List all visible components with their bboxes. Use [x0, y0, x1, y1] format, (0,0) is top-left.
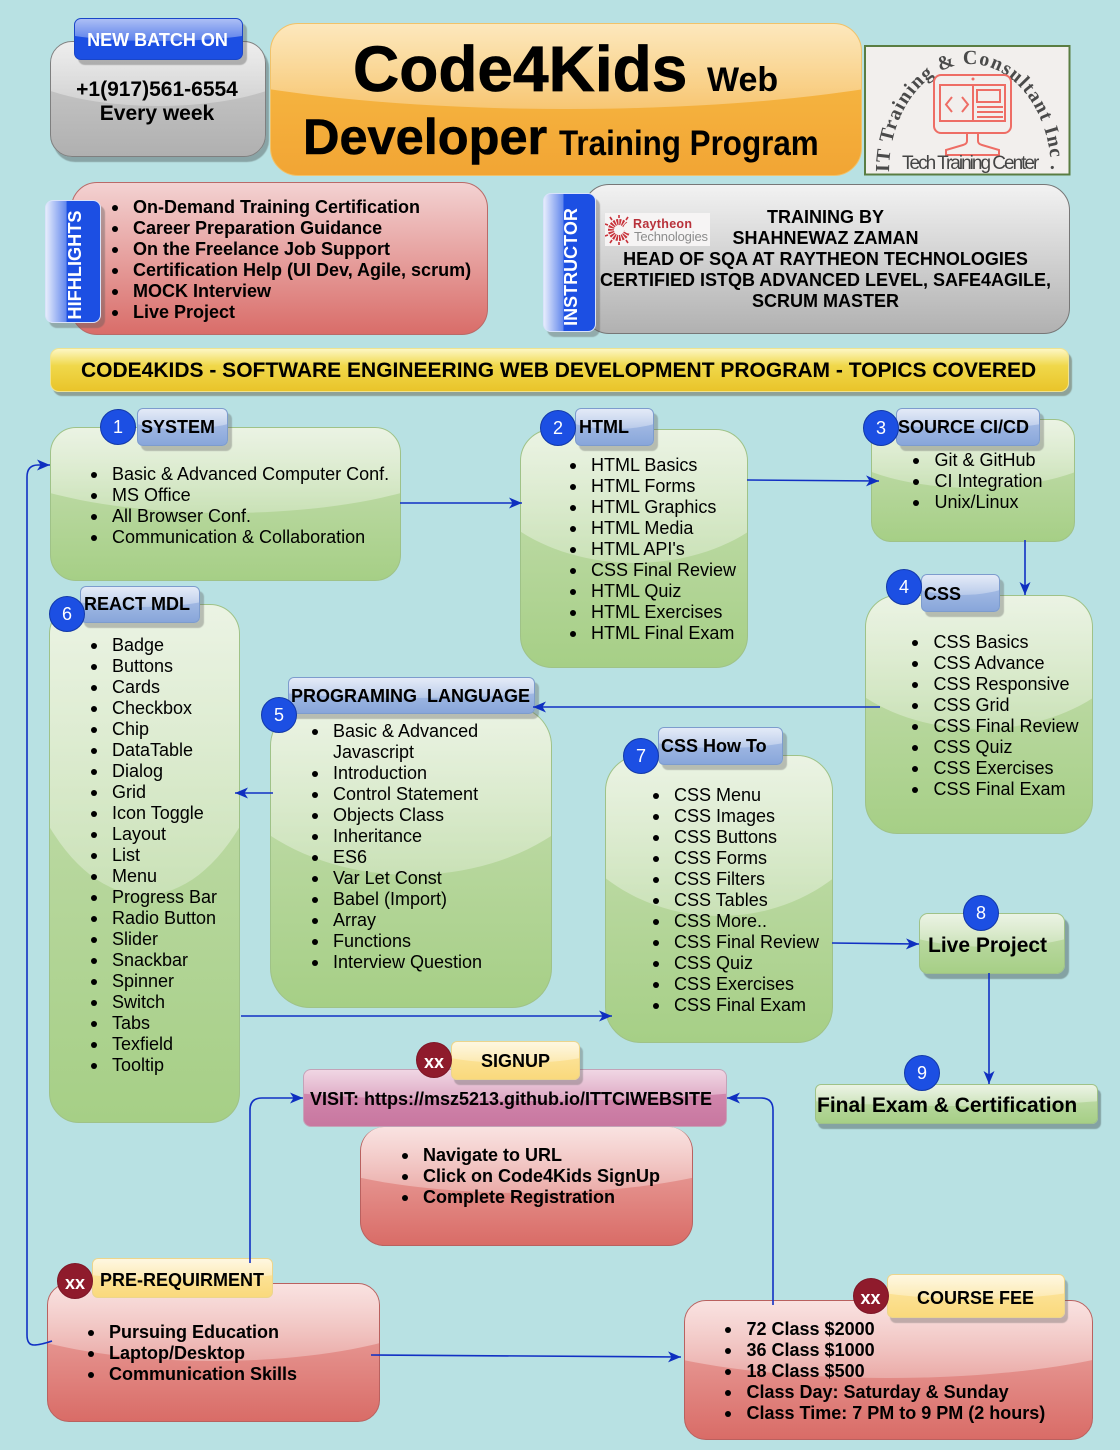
panel: signup: [303, 1041, 727, 1246]
badge: 6: 6: [62, 604, 72, 624]
heading: css: CSS: [924, 584, 961, 604]
list: css how to: CSS Quiz: [674, 953, 753, 973]
arrow: programing language to react: [235, 792, 273, 794]
list: css: CSS Grid: [934, 695, 1010, 715]
list: highlights: Certification Help (UI Dev, Agile, scrum): [133, 260, 471, 280]
list: html: HTML Forms: [591, 476, 695, 496]
heading: programing language: PROGRAMING LANGUAGE: [291, 686, 530, 706]
list: react mdl: Checkbox: [112, 698, 192, 718]
panel: highlights: [45, 182, 488, 335]
arrow: pre-requirment to signup: [250, 1098, 303, 1263]
arrow: system to html: [400, 502, 522, 504]
badge: 9: [904, 1055, 940, 1091]
list: programing language: Array: [333, 910, 376, 930]
list: react mdl: Texfield: [112, 1034, 173, 1054]
list: programing language: [312, 720, 482, 972]
panel: title: [270, 23, 862, 176]
panel: instructor: [543, 184, 1070, 338]
list: react mdl: Dialog: [112, 761, 163, 781]
list: source ci/cd: CI Integration: [934, 471, 1043, 491]
heading: system: SYSTEM: [141, 417, 215, 437]
list: css how to: CSS Menu: [674, 785, 761, 805]
list: react mdl: Layout: [112, 824, 166, 844]
badge: 7: [623, 738, 659, 774]
list: html: HTML Graphics: [591, 497, 716, 517]
tab: source ci/cd: [896, 408, 1040, 446]
badge: signup: xx: [424, 1052, 444, 1072]
list: react mdl: List: [112, 845, 140, 865]
heading: source ci/cd: SOURCE CI/CD: [898, 417, 1029, 437]
title text: Code4Kids: [353, 33, 687, 105]
text: phone and schedule: [76, 78, 238, 125]
tab: pre-requirment: [92, 1258, 273, 1298]
tab: course fee: [886, 1274, 1064, 1318]
list: react mdl: Badge: [112, 635, 164, 655]
badge: 1: [100, 409, 136, 445]
list: css how to: CSS Filters: [674, 869, 765, 889]
list: highlights: MOCK Interview: [133, 281, 271, 301]
list: css: CSS Final Review: [934, 716, 1079, 736]
arrow: css how to to live project: [832, 943, 919, 944]
arrow: live project to final exam: [988, 973, 990, 1084]
list: css: CSS Basics: [934, 632, 1029, 652]
tab: css: [921, 574, 1000, 612]
arrow: pre-requirment to course fee: [371, 1355, 681, 1357]
list: signup steps: [402, 1145, 660, 1207]
list: programing language: Javascript: [333, 742, 414, 762]
list: source ci/cd: Unix/Linux: [934, 492, 1019, 512]
list: css how to: CSS More..: [674, 911, 767, 931]
tab: signup: [451, 1041, 580, 1080]
badge: pre-requirment: [57, 1263, 93, 1299]
list: programing language: Introduction: [333, 762, 427, 782]
list: css: [912, 632, 1079, 799]
list: system: Basic & Advanced Computer Conf.: [112, 464, 389, 484]
list: react mdl: Chip: [112, 719, 149, 739]
banner text: CODE4KIDS - SOFTWARE ENGINEERING WEB DEVELOPMENT PROGRAM - TOPICS COVERED: [81, 359, 1036, 382]
list: react mdl: [91, 635, 217, 1075]
panel: 1 system: [50, 408, 401, 581]
text: trainer credentials: TRAINING BY: [767, 207, 884, 227]
panel: 2 html: [520, 408, 748, 668]
list: source ci/cd: [913, 450, 1043, 512]
list: system: MS Office: [112, 485, 191, 505]
arrow: course fee to signup: [727, 1098, 773, 1305]
list: prerequisites: Pursuing Education: [109, 1322, 279, 1342]
label: instructor: INSTRUCTOR: [561, 208, 581, 326]
panel: 9 final exam: [815, 1055, 1102, 1130]
arrow: source to css: [1024, 540, 1026, 595]
list: highlights: Career Preparation Guidance: [133, 218, 382, 238]
list: highlights: [112, 197, 471, 322]
badge: 4: 4: [899, 577, 909, 597]
list: course fee: 72 Class $2000: [746, 1319, 875, 1339]
list: css: CSS Final Exam: [934, 779, 1066, 799]
list: programing language: Control Statement: [333, 784, 478, 804]
panel: pre-requirment: [47, 1258, 380, 1422]
badge: 7: 7: [636, 746, 646, 766]
badge: pre-requirment: xx: [65, 1273, 85, 1293]
heading: final exam & certification: Final Exam & Certification: [817, 1094, 1077, 1117]
text: trainer credentials: SHAHNEWAZ ZAMAN: [732, 228, 918, 248]
list: react mdl: Tabs: [112, 1013, 150, 1033]
list: react mdl: Buttons: [112, 656, 173, 676]
heading: new batch on: NEW BATCH ON: [87, 30, 228, 50]
list: html: HTML API's: [591, 539, 685, 559]
list: programing language: Var Let Const: [333, 868, 442, 888]
tab: html: [575, 408, 654, 446]
panel: course fee: [684, 1274, 1093, 1440]
arrow: css to programing language: [533, 706, 880, 708]
list: html: HTML Final Exam: [591, 623, 734, 643]
list: programing language: Functions: [333, 930, 411, 950]
list: css how to: CSS Exercises: [674, 974, 794, 994]
arrow: html to source: [747, 480, 879, 481]
badge: 5: 5: [274, 705, 284, 725]
list: html: CSS Final Review: [591, 560, 736, 580]
list: prerequisites: Laptop/Desktop: [109, 1343, 245, 1363]
text: phone and schedule: +1(917)561-6554: [76, 78, 238, 101]
list: react mdl: Spinner: [112, 971, 174, 991]
label: highlights: HIFHLIGHTS: [65, 210, 85, 320]
logo: Raytheon Technologies: Raytheon: [633, 217, 692, 231]
list: programing language: Basic & Advanced: [333, 720, 478, 740]
tab: highlights: [45, 200, 101, 323]
list: react mdl: Icon Toggle: [112, 803, 204, 823]
list: css: CSS Responsive: [934, 674, 1070, 694]
list: react mdl: Menu: [112, 866, 157, 886]
panel: new batch: [50, 18, 270, 162]
list: signup steps: Click on Code4Kids SignUp: [423, 1166, 660, 1186]
panel: 5 programing language: [261, 677, 552, 1008]
panel: 8 live project: [919, 895, 1070, 980]
badge: 5: [261, 697, 297, 733]
badge: 1: 1: [113, 417, 123, 437]
list: react mdl: Grid: [112, 782, 146, 802]
list: course fee: 36 Class $1000: [746, 1340, 875, 1360]
list: course fee: Class Time: 7 PM to 9 PM (2 hours): [746, 1403, 1045, 1423]
heading: html: HTML: [579, 417, 629, 437]
list: programing language: Interview Question: [333, 952, 482, 972]
badge: 8: [963, 895, 999, 931]
list: course fee: Class Day: Saturday & Sunday: [746, 1382, 1009, 1402]
tab: programing language: [288, 677, 535, 714]
list: css how to: CSS Final Review: [674, 932, 819, 952]
text: visit url: VISIT: https://msz5213.github.io/ITTCIWEBSITE: [310, 1089, 712, 1109]
list: html: [570, 455, 736, 643]
badge: 3: [863, 410, 899, 446]
list: css how to: CSS Forms: [674, 848, 767, 868]
badge: 6: [49, 596, 85, 632]
logo: Raytheon Technologies: [605, 213, 710, 246]
list: system: Communication & Collaboration: [112, 527, 365, 547]
badge: 2: 2: [553, 418, 563, 438]
badge: 3: 3: [876, 418, 886, 438]
panel: 4 css: [865, 569, 1093, 834]
list: react mdl: Slider: [112, 929, 158, 949]
logo: IT Training & Consultant: Tech Training Center: [902, 153, 1040, 174]
list: html: HTML Media: [591, 518, 693, 538]
title text: Developer: [303, 108, 547, 165]
list: system: [91, 464, 389, 547]
list: course fee: [725, 1319, 1045, 1423]
list: signup steps: Complete Registration: [423, 1187, 615, 1207]
tab: new batch on: [74, 18, 243, 60]
list: highlights: On-Demand Training Certification: [133, 197, 420, 217]
list: css how to: CSS Final Exam: [674, 995, 806, 1015]
tab: react mdl: [80, 586, 200, 623]
badge: 9: 9: [917, 1063, 927, 1083]
badge: course fee: xx: [860, 1288, 881, 1308]
heading: course fee: COURSE FEE: [917, 1288, 1034, 1308]
arrow: pre-requirment to system: [27, 465, 52, 1345]
tab: css how to: [658, 727, 783, 765]
heading: css how to: CSS How To: [661, 736, 767, 756]
list: css how to: CSS Buttons: [674, 827, 777, 847]
list: prerequisites: Communication Skills: [109, 1364, 297, 1384]
text: trainer credentials: SCRUM MASTER: [752, 291, 899, 311]
heading: pre-requirment: PRE-REQUIRMENT: [100, 1270, 264, 1290]
badge: 2: [540, 410, 576, 446]
panel: 7 css how to: [605, 727, 833, 1043]
list: programing language: ES6: [333, 846, 367, 866]
list: react mdl: Tooltip: [112, 1055, 164, 1075]
list: prerequisites: [88, 1322, 297, 1384]
list: programing language: Babel (Import): [333, 888, 447, 908]
title text: Web: [707, 61, 778, 99]
list: css: CSS Advance: [934, 653, 1045, 673]
badge: 8: 8: [976, 903, 986, 923]
badge: signup: [416, 1042, 452, 1078]
text: trainer credentials: CERTIFIED ISTQB ADVANCED LEVEL, SAFE4AGILE,: [600, 270, 1051, 290]
panel: 3 source ci/cd: [863, 408, 1075, 542]
list: system: All Browser Conf.: [112, 506, 251, 526]
list: react mdl: Switch: [112, 992, 165, 1012]
text: trainer credentials: HEAD OF SQA AT RAYTHEON TECHNOLOGIES: [623, 249, 1028, 269]
logo: IT Training & Consultant: IT Training & Consultant Inc .: [876, 50, 1060, 172]
banner: topics covered: [50, 348, 1072, 396]
heading: live project: Live Project: [928, 934, 1047, 957]
badge: 4: [886, 569, 922, 605]
tab: instructor: [543, 193, 596, 332]
list: programing language: Inheritance: [333, 826, 422, 846]
list: html: HTML Basics: [591, 455, 697, 475]
text: trainer credentials: [600, 207, 1051, 311]
list: source ci/cd: Git & GitHub: [934, 450, 1036, 470]
list: css: CSS Exercises: [934, 758, 1054, 778]
list: html: HTML Quiz: [591, 581, 681, 601]
list: course fee: 18 Class $500: [746, 1361, 865, 1381]
arrow: react to css how to: [241, 1015, 612, 1017]
list: css how to: [653, 785, 819, 1015]
list: highlights: On the Freelance Job Support: [133, 239, 390, 259]
badge: course fee: [852, 1278, 888, 1314]
list: css how to: CSS Tables: [674, 890, 768, 910]
list: react mdl: Cards: [112, 677, 160, 697]
list: css: CSS Quiz: [934, 737, 1013, 757]
list: react mdl: DataTable: [112, 740, 193, 760]
title text: Training Program: [559, 124, 819, 163]
logo: Raytheon Technologies: Technologies: [634, 229, 708, 244]
tab: system: [137, 408, 228, 446]
list: css how to: CSS Images: [674, 806, 775, 826]
text: phone and schedule: Every week: [100, 102, 214, 125]
url bar: [303, 1069, 727, 1127]
list: react mdl: Radio Button: [112, 908, 216, 928]
panel: 6 react mdl: [49, 586, 240, 1123]
list: react mdl: Progress Bar: [112, 887, 217, 907]
list: signup steps: Navigate to URL: [423, 1145, 562, 1165]
heading: react mdl: REACT MDL: [84, 594, 190, 614]
list: react mdl: Snackbar: [112, 950, 188, 970]
title text: [303, 33, 819, 165]
list: highlights: Live Project: [133, 302, 235, 322]
list: html: HTML Exercises: [591, 602, 722, 622]
list: programing language: Objects Class: [333, 804, 444, 824]
heading: signup: SIGNUP: [481, 1051, 550, 1071]
